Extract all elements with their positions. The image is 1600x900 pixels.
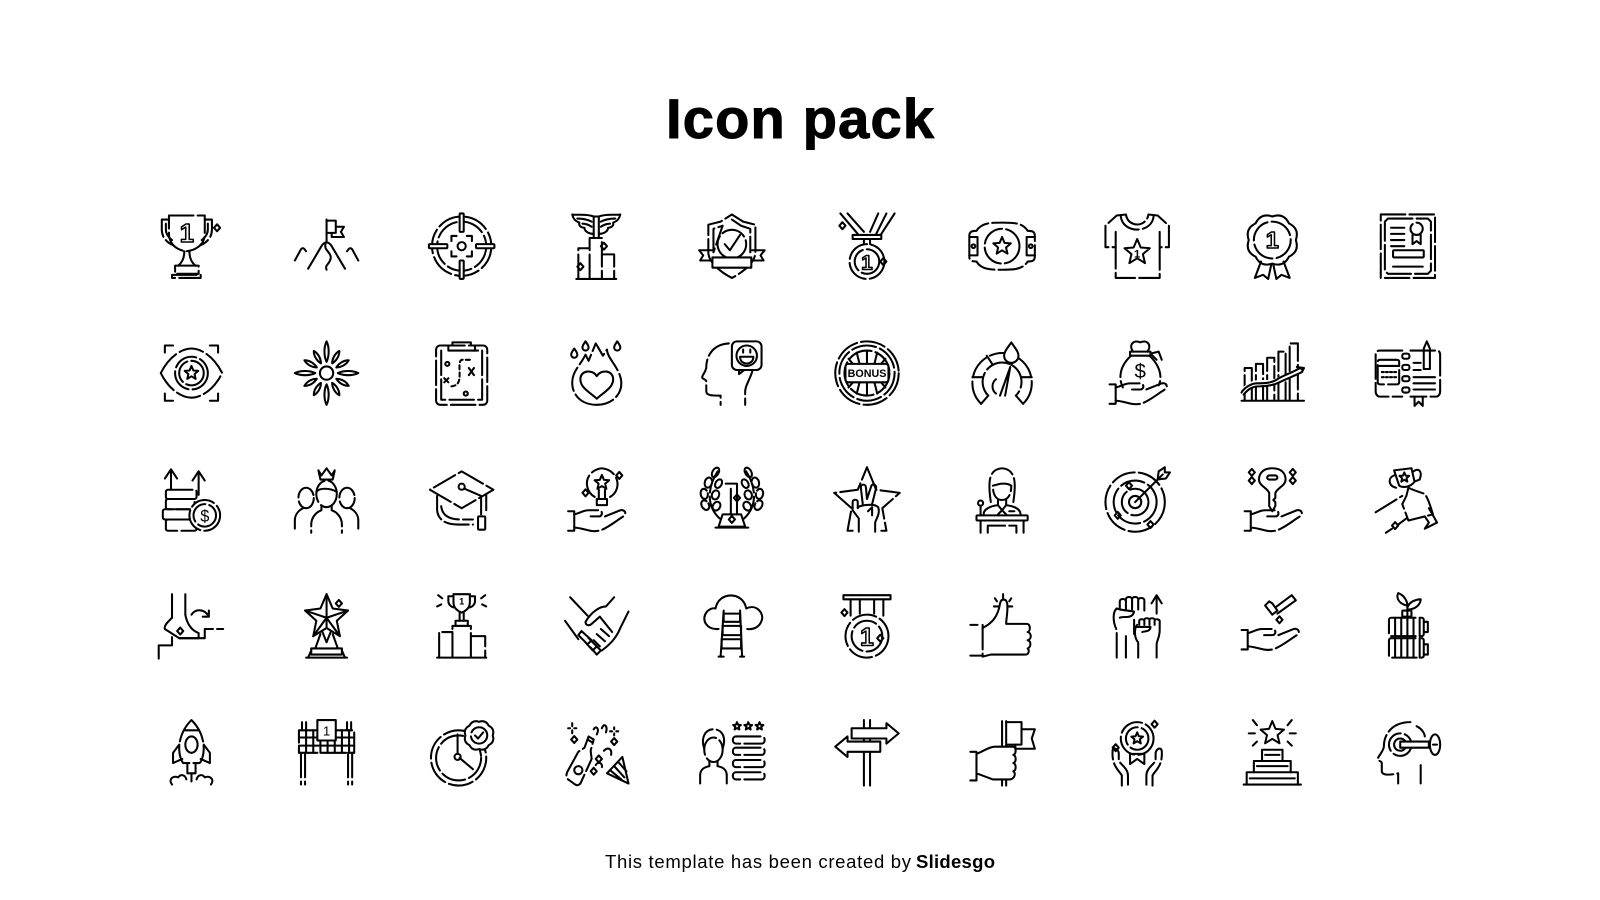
- icon: rocket: [171, 720, 212, 785]
- icon: laurel trophy: [700, 466, 764, 528]
- icon: eye with star: [161, 345, 222, 401]
- icon: mountain with flag: [295, 220, 358, 270]
- icon: clock with gear: [431, 721, 493, 786]
- icon: trophy on podium: 1: [459, 596, 464, 606]
- icon: medal with ribbon: [839, 213, 895, 279]
- icon: finish line gate: [299, 720, 354, 785]
- icon: rosette: 1: [1266, 227, 1279, 253]
- icon: gauge with flame: [972, 342, 1032, 404]
- icon: money bag on hand: $: [1135, 360, 1147, 383]
- icon: clipboard strategy: [436, 342, 487, 405]
- icon: growth chart: [1242, 343, 1304, 401]
- icon: direction signpost: [835, 720, 899, 786]
- icon: star with victory hand: [834, 467, 900, 532]
- icon: medal with ribbon: 1: [861, 252, 873, 275]
- icon: dart target: [1105, 467, 1170, 532]
- icon: finish line gate: 1: [323, 723, 330, 738]
- icon: rosette: [1248, 215, 1297, 279]
- icon: trophy: 1: [180, 220, 194, 248]
- icon: hands holding award: [1113, 721, 1162, 786]
- icon: trophy: [162, 215, 220, 278]
- icon: head with smiley: [702, 341, 762, 405]
- icon: raised fists: [1114, 595, 1162, 658]
- icon: key above hand: [1245, 468, 1302, 531]
- icon: certificate: [1381, 214, 1435, 278]
- icon: champagne and party hat: [566, 723, 628, 785]
- icon: woman at podium: [976, 468, 1028, 533]
- icon: bonus chip: BONUS: [848, 368, 886, 380]
- icon grid: [159, 213, 1440, 786]
- icon: bonus chip: [835, 341, 899, 405]
- icon: winged podium: [572, 214, 620, 279]
- footer credit: This template has been created by: [605, 851, 912, 872]
- icon: team with crown: [295, 468, 358, 533]
- icon: firework burst: [295, 341, 358, 405]
- footer credit: Slidesgo: [916, 851, 995, 872]
- icon: head with key: [1378, 722, 1440, 784]
- icon: hand raising trophy: [1376, 468, 1437, 533]
- icon: star award: [305, 594, 348, 658]
- icon: thumbs up: [970, 594, 1031, 657]
- icon: trophy on podium: [437, 594, 486, 658]
- icon: t-shirt: [1105, 214, 1169, 278]
- title: Icon pack: [666, 87, 935, 150]
- icon: star on pyramid steps: [1244, 720, 1301, 785]
- icon: idea bulb on hand: [568, 468, 625, 531]
- icon: hanging medal: [841, 595, 891, 658]
- icon: champion belt: [969, 223, 1035, 270]
- icon: foot stepping up: [159, 594, 223, 659]
- icon: person with rating list: [700, 722, 765, 784]
- icon: shield with check: [699, 214, 765, 278]
- icon: planner notebook: [1376, 341, 1440, 406]
- icon: money bag on hand: [1110, 341, 1167, 404]
- icon: check above hand: [1242, 595, 1299, 650]
- icon: flaming heart: [571, 341, 621, 405]
- icon: t-shirt: 1: [1134, 248, 1140, 260]
- icon: graduation cap: [430, 471, 493, 530]
- icon: coin stack with arrows: [163, 469, 220, 531]
- icon: coins with sprout: [1389, 593, 1428, 658]
- icon: coin stack with arrows: $: [200, 508, 209, 526]
- icon: hanging medal: 1: [860, 624, 874, 651]
- icon: handshake: [565, 597, 628, 655]
- icon: hand holding flag: [970, 721, 1035, 786]
- icon: crosshair target: [429, 213, 494, 279]
- icon: cloud and ladder: [704, 595, 762, 657]
